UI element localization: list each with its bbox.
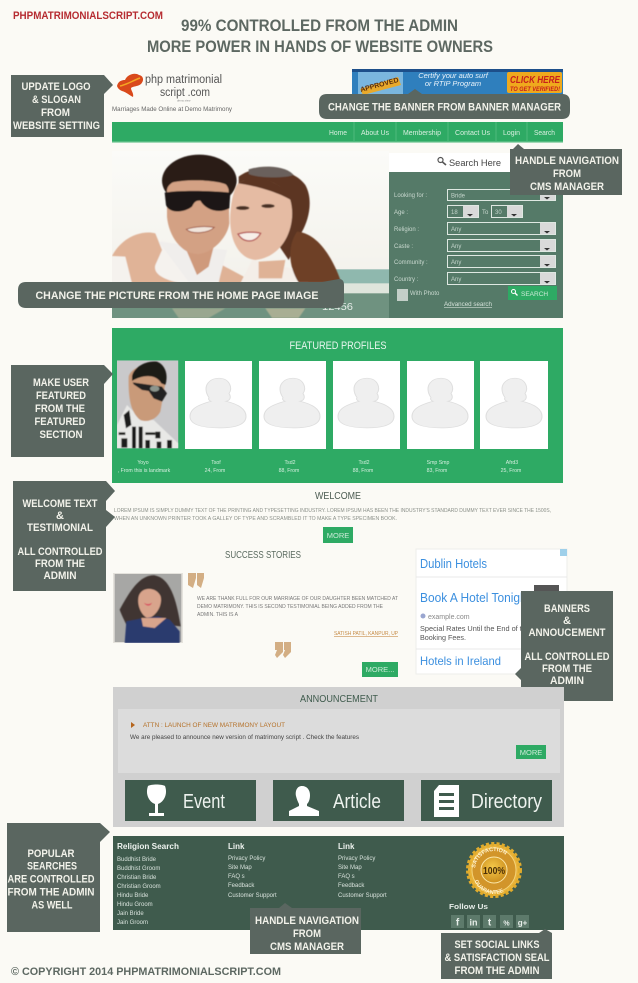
icon: logo emblem [117,74,143,97]
callout: update logo: FROM [41,107,70,119]
callout: social links: SET SOCIAL LINKS [454,939,540,951]
callout: popular searches [7,823,110,932]
more button: MORE [327,531,349,540]
woman sunglasses on head [249,167,294,177]
social icons: g+ [518,918,528,928]
icon: arrow bullet [131,722,135,728]
callout: welcome and testimonial [13,481,115,591]
profile captions [118,460,521,474]
callout: navigation cms: CMS MANAGER [530,181,604,193]
top banner: CLICK HERE [510,75,560,86]
link column 2: FAQ s [338,874,355,880]
icon: wine glass [147,784,166,816]
search panel: SEARCH [521,291,548,298]
satisfaction seal [466,842,522,898]
callout: navigation cms: HANDLE NAVIGATION [515,155,619,167]
link column 2: Link [338,842,355,851]
tile: directory [421,780,552,821]
panel: featured profiles [112,328,563,483]
icon: closing quote [275,642,291,658]
success stories [113,550,399,677]
tile: event: Event [183,791,225,813]
profile photo: man [117,360,178,448]
copyright: © COPYRIGHT 2014 PHPMATRIMONIALSCRIPT.COM [11,966,281,978]
callout: banners and announcement: ALL CONTROLLED [524,651,610,663]
icon: opening quote [188,573,204,588]
search panel: To [482,210,489,216]
ad banner: Dublin Hotels [420,557,487,571]
callout: social links: & SATISFACTION SEAL [444,952,550,964]
religion search links: Religion Search [117,842,179,851]
title: MORE POWER IN HANDS OF WEBSITE OWNERS [147,37,493,56]
callout: update logo: WEBSITE SETTING [13,120,100,132]
shirts and arm [112,240,229,283]
profile placeholder cards [185,361,548,449]
profile captions: 88, From [353,468,373,474]
search panel: Looking for : [394,193,427,199]
search panel: Religion : [394,227,419,233]
religion search links: Christian Bride [117,875,157,881]
top banner [352,69,563,95]
navigation bar [112,122,563,143]
panel: footer [113,836,564,930]
top banner: Certify your auto surf [418,71,489,80]
profile captions: 24, From [205,468,225,474]
logo: script .com [160,87,210,99]
success stories: SUCCESS STORIES [225,550,301,561]
logo [112,74,233,113]
search panel: Caste : [394,244,413,250]
link column 1: Link [228,842,245,851]
profile captions: 25, From [501,468,521,474]
satisfaction seal: SATISFACTION [472,847,508,868]
link column 1: Customer Support [228,893,277,899]
panel: announcement [113,687,564,827]
testimonial text: DEMO MATRIMONY. THIS IS SECOND TESTIMONIAL BEING ADDED FROM THE [197,604,383,610]
welcome section: WELCOME [315,491,361,502]
top banner: APPROVED [360,77,399,94]
callout: footer navigation cms [250,903,361,954]
ad banner [416,549,567,674]
callout: update logo: & SLOGAN [32,94,81,106]
navigation bar: Search [534,128,555,137]
link column 1 [228,842,277,899]
social icons: f [456,918,460,928]
link column 2: Customer Support [338,893,387,899]
religion search links: Jain Groom [117,920,148,926]
callout: welcome and testimonial: ALL CONTROLLED [18,546,103,558]
religion search links: Buddhist Groom [117,866,160,872]
callout: make user featured: MAKE USER [33,377,89,389]
link column 1: Feedback [228,883,255,889]
callout: popular searches: POPULAR [28,848,75,860]
link column 1: Site Map [228,865,252,871]
callout: banners and announcement: & [563,615,571,627]
profile captions: Tsd2 [285,460,296,466]
icon: magnifier [438,158,446,165]
link column 1: Privacy Policy [228,856,265,862]
callout: banners and announcement: BANNERS [544,603,590,615]
search panel: Search Here [449,158,501,169]
social icons [451,915,529,928]
navigation bar: Home [329,128,347,137]
navigation bar: Contact Us [455,128,490,137]
tile: directory: Directory [471,791,542,813]
callout: update logo: UPDATE LOGO [22,81,91,93]
logo: demo.view [177,98,191,102]
top banner: or RTIP Program [425,79,481,88]
link column 1: FAQ s [228,874,245,880]
woman hair back [239,169,310,260]
religion search links [117,842,179,926]
callout: popular searches: ARE CONTROLLED [8,874,95,886]
more button: MORE... [366,665,394,674]
callout: make user featured: FEATURED [36,390,86,402]
search panel: Any [451,260,461,266]
panel: announcement: We are pleased to announce new version of matrimony script . Check the features [130,734,360,741]
testimonial text: ADMIN. THIS IS A [197,612,238,618]
search panel [389,153,563,318]
callout: welcome and testimonial: FROM THE [35,558,85,570]
callout: welcome and testimonial: WELCOME TEXT [22,498,98,510]
woman face [230,179,292,260]
callout: make user featured: FEATURED [34,416,86,428]
title [147,16,493,56]
testimonial photo [113,573,183,643]
callout: footer navigation cms: CMS MANAGER [270,941,344,953]
callout: popular searches: AS WELL [32,900,73,912]
tile: article [273,780,404,821]
brand name: PHPMATRIMONIALSCRIPT.COM [13,10,163,22]
social icons: % [503,920,510,928]
top banner: TO GET VERIFIED! [510,86,560,93]
satisfaction seal: 100% [483,866,505,877]
callout: banner manager: CHANGE THE BANNER FROM BANNER MANAGER [328,102,561,114]
profile captions: 88, From [279,468,299,474]
sunglasses [165,191,230,211]
more button [362,662,398,677]
callout: make user featured: FROM THE [35,403,85,415]
panel: announcement: ATTN : LAUNCH OF NEW MATRIMONY LAYOUT [143,722,285,729]
search panel: Any [451,227,461,233]
profile captions: Smp Smp [427,460,449,466]
callout: welcome and testimonial: ADMIN [44,570,77,582]
callout: banners and announcement [515,591,613,701]
ad banner: example.com [428,614,470,621]
navigation bar: Login [503,128,520,137]
callout: banners and announcement: ANNOUCEMENT [528,627,606,639]
link column 2: Privacy Policy [338,856,375,862]
ad banner: Special Rates Until the End of the [420,624,530,633]
title: 99% CONTROLLED FROM THE ADMIN [181,16,458,35]
link column 2 [338,842,387,899]
testimonial text: WE ARE THANK FULL FOR OUR MARRIAGE OF OUR DAUGHTER BEEN MATCHED AT [197,596,399,602]
profile captions: Afrd3 [506,460,518,466]
search panel: Any [451,277,461,283]
callout: home page image [18,279,344,308]
search panel: Any [451,244,461,250]
search panel: Advanced search [444,302,492,308]
callout: banner manager [319,89,570,119]
search panel: 30 [495,210,502,216]
callout: social links [441,929,552,979]
icon: person [289,786,319,816]
lower figures behind strip [172,308,225,318]
welcome section: LOREM IPSUM IS SIMPLY DUMMY TEXT OF THE PRINTING AND TYPESETTING INDUSTRY. LOREM IPSUM HAS BEEN THE INDUSTRY'S STANDARD DUMMY TEXT EVER SINCE THE 1500S, [114,508,551,514]
callout: welcome and testimonial: TESTIMONIAL [27,522,93,534]
welcome section [114,491,551,543]
callout: make user featured [11,365,113,457]
search panel: Community : [394,260,428,266]
profile captions: Tsof [211,460,221,466]
callout: popular searches: SEARCHES [27,860,77,872]
ad banner: Book A Hotel Tonight [420,590,530,605]
callout: popular searches: FROM THE ADMIN [8,886,95,898]
social icons: in [470,918,478,928]
follow us: Follow Us [449,902,488,911]
search panel: Age : [394,210,408,216]
satisfaction seal: GUARANTEE [475,880,504,894]
callout: update logo [11,75,113,137]
religion search links: Hindu Groom [117,902,153,908]
search panel: 18 [451,210,458,216]
ad banner: Booking Fees. [420,633,466,642]
callout: welcome and testimonial: & [56,510,64,522]
search panel: Country : [394,277,419,283]
icon: document [434,785,459,817]
search panel: With Photo [410,291,440,297]
callout: social links: FROM THE ADMIN [454,965,540,977]
testimonial text [197,596,399,618]
navigation bar: About Us [361,128,389,137]
man face [167,176,229,254]
testimonial author: SATISH PATIL, KANPUR, UP [334,631,398,637]
welcome section: WHEN AN UNKNOWN PRINTER TOOK A GALLEY OF TYPE AND SCRAMBLED IT TO MAKE A TYPE SPECIMEN BOOK. [114,516,397,522]
callout: navigation cms: FROM [553,168,581,180]
callout: navigation cms [510,144,622,195]
callout: home page image: CHANGE THE PICTURE FROM THE HOME PAGE IMAGE [36,290,318,302]
logo: php matrimonial [145,74,222,86]
profile captions: , From this is landmark [118,468,171,474]
man hair [161,154,238,196]
callout: banners and announcement: ADMIN [550,675,584,687]
callout: footer navigation cms: FROM [293,928,321,940]
religion search links: Buddhist Bride [117,857,157,863]
link column 2: Site Map [338,865,362,871]
profile captions: Yoyo [137,460,149,466]
profile captions: Tsd2 [359,460,370,466]
more button [516,745,546,759]
social icons: t [488,918,492,928]
search panel: Bride [451,194,466,200]
panel: featured profiles: FEATURED PROFILES [290,340,386,352]
tile: article: Article [333,791,381,813]
ad banner: Hotels in Ireland [420,654,501,668]
profile captions: 83, From [427,468,447,474]
link column 2: Feedback [338,883,365,889]
hero photo: couple [112,150,389,318]
callout: banners and announcement: FROM THE [542,663,592,675]
more button: MORE [520,748,542,757]
more button [323,527,353,543]
callout: make user featured: SECTION [40,429,83,441]
religion search links: Christian Groom [117,884,161,890]
logo: Marriages Made Online at Demo Matrimony [112,106,233,113]
tile: event [125,780,256,821]
callout: footer navigation cms: HANDLE NAVIGATION [255,915,359,927]
navigation bar: Membership [403,128,441,137]
panel: announcement: ANNOUNCEMENT [300,694,378,705]
religion search links: Jain Bride [117,911,144,917]
religion search links: Hindu Bride [117,893,149,899]
hero caption number: 12456 [322,302,353,313]
